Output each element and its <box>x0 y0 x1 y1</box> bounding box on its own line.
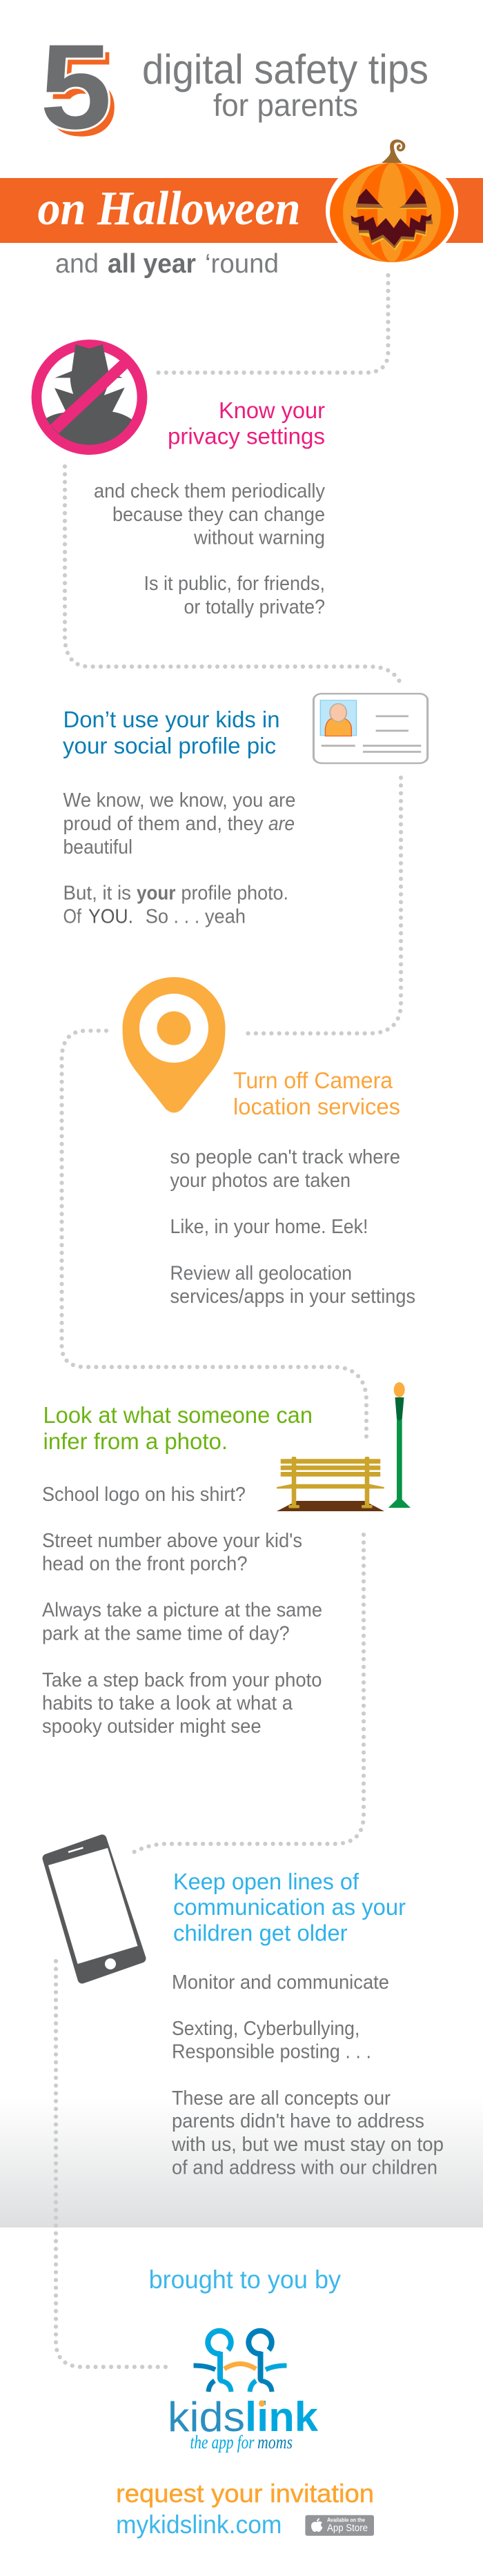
body text: Street number above your kid's <box>42 1530 302 1552</box>
icon: map pin <box>123 977 225 1112</box>
subtitle: ‘round <box>205 249 279 279</box>
footer <box>116 2265 374 2539</box>
icon: ID card <box>313 694 428 763</box>
dotted connector: pumpkin to privacy icon <box>158 275 388 373</box>
heading: Know your <box>219 397 325 423</box>
request your invitation: request your invitation <box>116 2479 374 2508</box>
dotted connector: location pin to bench <box>62 1031 366 1439</box>
logo mark: two linked figures <box>193 2331 287 2392</box>
body text: spooky outsider might see <box>42 1715 262 1738</box>
body text: habits to take a look at what a <box>42 1693 293 1715</box>
heading: children get older <box>173 1920 348 1946</box>
body text: Take a step back from your photo <box>42 1669 322 1691</box>
orange banner <box>0 178 483 243</box>
body text: and check them periodically <box>94 480 325 502</box>
badge: App Store: Available on the <box>327 2517 365 2524</box>
panel: profile pic <box>63 694 428 927</box>
icon: pumpkin <box>326 139 458 266</box>
body text: Review all geolocation <box>170 1263 352 1285</box>
body text: Of <box>63 905 82 927</box>
icon: street lamp <box>388 1382 411 1508</box>
panel: location services <box>123 977 415 1308</box>
dotted connector: privacy to ID card <box>65 466 400 682</box>
badge: App Store: App Store <box>327 2522 368 2534</box>
body text: School logo on his shirt? <box>42 1484 246 1506</box>
body text: Sexting, Cyberbullying, <box>172 2018 359 2040</box>
body text: of and address with our children <box>172 2157 437 2179</box>
logo orange dot <box>259 2400 265 2407</box>
website: mykidslink.com <box>116 2510 282 2539</box>
body text: proud of them and, they <box>63 813 264 835</box>
body text: so people can't track where <box>170 1146 400 1168</box>
body text: head on the front porch? <box>42 1553 247 1575</box>
panel: privacy settings <box>32 340 331 618</box>
body text: Monitor and communicate <box>172 1972 389 1994</box>
heading: communication as your <box>173 1894 406 1920</box>
dotted connector: phone to logo <box>56 1961 168 2367</box>
icon: park bench <box>277 1457 384 1511</box>
body text: your photos are taken <box>170 1170 351 1192</box>
heading: privacy settings <box>168 424 325 449</box>
title: digital safety tips <box>142 46 428 92</box>
title: for parents <box>213 88 358 123</box>
heading: your social profile pic <box>63 733 276 758</box>
heading: infer from a photo. <box>43 1428 228 1454</box>
dotted connector: ID card to location pin <box>242 778 401 1034</box>
logo tagline: the app for <box>190 2432 255 2452</box>
heading: Don’t use your kids in <box>63 707 280 732</box>
body text: beautiful <box>63 836 132 858</box>
logo tagline: moms <box>257 2432 293 2452</box>
heading: location services <box>233 1094 400 1119</box>
body text: profile photo. <box>181 882 288 904</box>
body text: Like, in your home. Eek! <box>170 1216 368 1238</box>
panel: infer from a photo <box>42 1382 411 1738</box>
body text: Always take a picture at the same <box>42 1600 322 1622</box>
body text: These are all concepts our <box>172 2087 391 2110</box>
body text: Responsible posting . . . <box>172 2041 371 2063</box>
big number 5: 5 <box>46 27 118 161</box>
icon: spy with prohibition sign <box>32 340 147 456</box>
banner text: on Halloween <box>37 182 301 235</box>
body text: because they can change <box>112 504 325 526</box>
bottom gradient band <box>0 2098 483 2228</box>
body text: without warning <box>193 527 325 549</box>
body text: YOU. <box>88 905 133 927</box>
heading: Keep open lines of <box>173 1869 359 1894</box>
heading: Turn off Camera <box>233 1068 393 1093</box>
body text: Is it public, for friends, <box>144 573 325 595</box>
body text: services/apps in your settings <box>170 1286 415 1308</box>
subtitle: all year <box>108 249 196 279</box>
body text: or totally private? <box>184 596 325 618</box>
body text: your <box>137 882 175 904</box>
body text: parents didn't have to address <box>172 2110 424 2132</box>
heading: Look at what someone can <box>43 1402 313 1428</box>
big number 5: 5 <box>40 20 112 155</box>
subtitle: and <box>55 249 99 279</box>
badge: App Store <box>305 2515 374 2536</box>
dotted connector: bench to phone <box>129 1535 364 1855</box>
panel: open communication <box>47 1839 449 2179</box>
big number 5: 5 <box>40 20 112 155</box>
body text: park at the same time of day? <box>42 1622 290 1644</box>
icon: smartphone <box>47 1839 141 1979</box>
logo wordmark: kids <box>168 2394 245 2440</box>
body text: We know, we know, you are <box>63 789 295 812</box>
header <box>0 20 483 279</box>
brought to you by: brought to you by <box>149 2265 341 2294</box>
body text: are <box>268 813 295 835</box>
body text: with us, but we must stay on top <box>171 2134 444 2156</box>
body text: But, it is <box>63 882 131 904</box>
logo wordmark: link <box>245 2394 319 2440</box>
body text: So . . . yeah <box>146 905 246 927</box>
